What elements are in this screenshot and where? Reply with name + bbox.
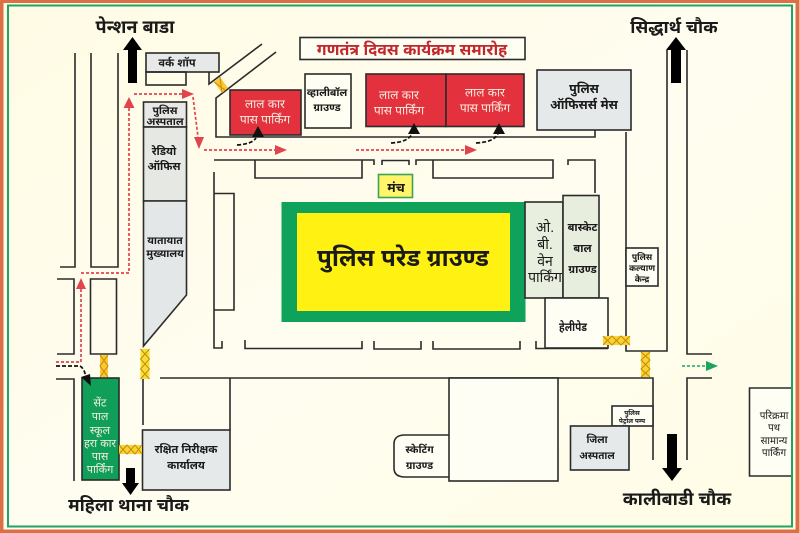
arrow: to Mahila Thana Chowk [122, 468, 139, 495]
panel: police petrol pump: पुलिस [624, 409, 640, 417]
panel: officers mess: ऑफिसर्स मेस [550, 97, 619, 112]
arrow: to Kalibadi Chowk [662, 434, 682, 481]
barricade: inspector office [119, 445, 142, 454]
black arrow: to school parking [56, 366, 91, 386]
panel: basketball ground: बाल [573, 243, 592, 255]
panel: skating ground: स्केटिंग [405, 442, 434, 456]
panel: police parade ground: पुलिस परेड ग्राउण्ड [317, 244, 489, 273]
panel: red parking 3: लाल कार [465, 86, 506, 100]
panel: OB van parking: पार्किंग [528, 269, 563, 285]
panel: district hospital [570, 426, 629, 470]
panel: OB van parking: वेन [537, 252, 553, 269]
panel: parikrama path general parking [750, 388, 791, 476]
panel: police petrol pump: पेट्रोल पम्प [619, 417, 646, 425]
black arrow: to parking 3 [476, 123, 505, 143]
panel: work shop [146, 53, 219, 85]
red route arrow: east along top [134, 89, 194, 99]
arrow: to Pension Bada [123, 37, 142, 83]
panel: volleyball ground: व्हालीबॉल [307, 86, 347, 99]
label: Mahila Thana Chowk: महिला थाना चौक [68, 495, 189, 515]
label: Pension Bada: पेन्शन बाडा [96, 17, 175, 37]
panel: reserve inspector office: कार्यालय [167, 459, 206, 472]
red route arrow: south-west entry [56, 278, 86, 362]
barricade: traffic HQ [140, 349, 150, 379]
red route arrow: to other parking [356, 145, 477, 155]
barricade: work shop road [214, 77, 228, 93]
panel: red parking 3: पास पार्किंग [460, 101, 510, 115]
panel: St Paul school green parking [82, 378, 119, 480]
panel: police welfare centre: पुलिस [632, 252, 653, 263]
panel: red parking 1: लाल कार [245, 97, 286, 111]
barricade: St Paul road [100, 355, 108, 377]
panel: basketball ground: बास्केट [568, 220, 598, 234]
red route arrow: to first parking [204, 145, 287, 155]
black arrow: to parking 2 [391, 123, 420, 143]
panel: parikrama path general parking: सामान्य [761, 436, 788, 447]
panel: red parking 1 [230, 90, 301, 135]
black arrow: to parking 1 [237, 126, 264, 145]
stage: मंच [387, 180, 406, 195]
red route arrow: west road north [81, 97, 134, 273]
panel: police petrol pump [612, 406, 653, 426]
title box [300, 38, 525, 60]
panel: OB van parking: बी. [537, 236, 553, 252]
road outlines [56, 44, 712, 481]
barricade: helipad [603, 336, 630, 345]
panel: St Paul school green parking: सेंट [94, 396, 107, 410]
panel: police welfare centre: कल्याण [629, 263, 655, 273]
panel: St Paul school green parking: स्कूल [90, 425, 111, 438]
panel: reserve inspector office: रक्षित निरीक्षक [155, 443, 218, 456]
panel: OB van parking [525, 202, 563, 298]
panel: traffic headquarters: मुख्यालय [146, 248, 184, 261]
panel: district hospital: जिला [586, 434, 609, 446]
panel: red parking 2 [366, 74, 446, 126]
title box: गणतंत्र दिवस कार्यक्रम समारोह [317, 40, 508, 59]
panel: parikrama path general parking: पार्किंग [762, 447, 786, 459]
panel: traffic headquarters [144, 201, 186, 346]
panel: parikrama path general parking: पथ [768, 423, 781, 434]
panel: red parking 3 [446, 74, 524, 126]
panel: reserve inspector office [142, 430, 230, 490]
panel: St Paul school green parking: हरा कार [84, 438, 117, 450]
barricade: east road [641, 352, 650, 377]
panel: red parking 2: लाल कार [379, 88, 420, 102]
panel: police hospital: पुलिस [152, 104, 178, 118]
panel: helipad: हेलीपेड [559, 319, 587, 334]
panel: police parade ground [282, 202, 526, 322]
panel: parikrama path general parking: परिक्रमा [760, 410, 789, 422]
panel: basketball ground [563, 196, 599, 298]
panel: police welfare centre [626, 248, 658, 286]
panel: traffic headquarters: यातायात [147, 235, 183, 247]
panel: red parking 2: पास पार्किंग [374, 104, 424, 118]
panel: volleyball ground [305, 74, 351, 128]
green route arrow: to general parking [682, 361, 718, 371]
panel: district hospital: अस्पताल [579, 451, 615, 462]
panel: police hospital [144, 102, 186, 128]
panel: skating ground: ग्राउण्ड [406, 460, 434, 472]
panel: OB van parking: ओ. [536, 219, 554, 235]
panel: officers mess [537, 70, 631, 130]
panel: radio office: ऑफिस [147, 160, 181, 173]
label: Kalibadi Chowk: कालीबाडी चौक [623, 489, 732, 509]
panel: officers mess: पुलिस [569, 81, 600, 98]
red route arrow: south to road [193, 97, 204, 149]
arrow: to Siddharth Chowk [666, 37, 686, 83]
label: Siddharth Chowk: सिद्धार्थ चौक [630, 17, 718, 37]
panel: red parking 1: पास पार्किंग [240, 112, 290, 126]
panel: work shop: वर्क शॉप [158, 56, 196, 70]
panel: helipad [545, 298, 608, 348]
panel: St Paul school green parking: पास [92, 451, 109, 463]
panel: basketball ground: ग्राउण्ड [568, 264, 597, 276]
panel: skating ground [394, 378, 558, 481]
panel: St Paul school green parking: पार्किंग [87, 463, 114, 476]
panel: volleyball ground: ग्राउण्ड [313, 102, 342, 114]
panel: radio office: रेडियो [151, 144, 177, 158]
stage [378, 174, 412, 198]
panel: St Paul school green parking: पाल [92, 411, 109, 423]
panel: radio office [144, 127, 186, 201]
panel: police welfare centre: केन्द्र [635, 274, 650, 284]
panel: police hospital: अस्पताल [146, 116, 184, 128]
